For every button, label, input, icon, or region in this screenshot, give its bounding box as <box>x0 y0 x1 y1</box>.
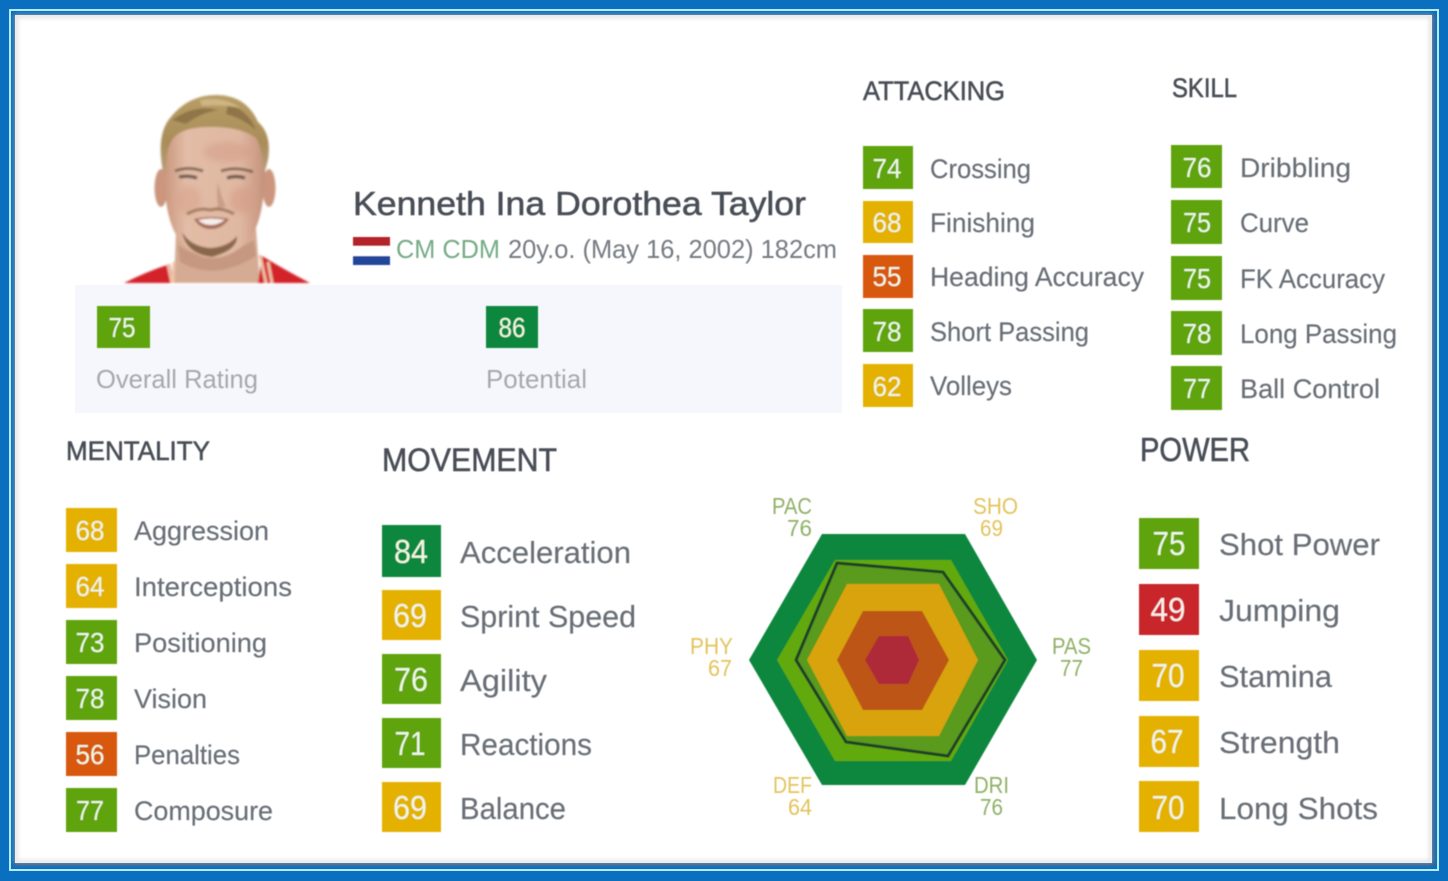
row: dribbling: Dribbling <box>1240 153 1351 183</box>
row: dribbling <box>1171 145 1351 188</box>
row: crossing <box>863 146 1031 189</box>
potential <box>486 306 587 394</box>
overall rating: Overall Rating <box>96 364 258 394</box>
panel: power <box>1139 431 1380 832</box>
hair strands <box>172 104 256 130</box>
overall rating <box>96 306 258 394</box>
row: balance: Balance <box>460 791 566 826</box>
player stats polygon fill <box>796 563 1005 756</box>
radar label: DEF: DEF <box>773 772 812 798</box>
row: curve <box>1171 200 1309 244</box>
forehead and cheek colouring <box>204 142 252 162</box>
player portrait <box>124 95 310 283</box>
radar label: DEF: 64 <box>788 794 812 820</box>
row: interceptions <box>66 564 292 608</box>
row: crossing: Crossing <box>930 154 1031 184</box>
row: agility <box>382 654 548 704</box>
potential: Potential <box>486 364 587 394</box>
radar label: DRI <box>974 772 1009 820</box>
row: vision <box>66 676 207 720</box>
heading: movement: MOVEMENT <box>382 442 557 478</box>
eyes <box>179 176 245 178</box>
row: short passing: 78 <box>872 316 902 347</box>
row: shot power: Shot Power <box>1219 527 1380 562</box>
jersey <box>124 256 310 283</box>
row: volleys <box>863 364 1012 407</box>
row: aggression: 68 <box>76 515 104 546</box>
row: long shots: 70 <box>1152 789 1184 826</box>
row: interceptions: 64 <box>76 571 104 602</box>
heading: skill: SKILL <box>1172 73 1237 103</box>
panel: skill <box>1171 73 1397 410</box>
row: strength <box>1139 716 1340 767</box>
row: aggression: Aggression <box>134 516 269 546</box>
panel: movement <box>382 442 636 832</box>
row: reactions: Reactions <box>460 727 592 762</box>
player name: Kenneth Ina Dorothea Taylor <box>353 185 806 222</box>
ears <box>154 169 168 207</box>
radar label: PAS: 77 <box>1060 655 1083 681</box>
row: heading accuracy: 55 <box>872 261 902 292</box>
row: long passing <box>1171 311 1397 355</box>
row: penalties: Penalties <box>134 740 240 770</box>
panel: rating background <box>75 285 842 413</box>
row: finishing: Finishing <box>930 208 1035 238</box>
goatee beard <box>182 232 237 257</box>
row: long passing: Long Passing <box>1240 319 1397 349</box>
row: finishing <box>863 201 1035 243</box>
panel: mentality <box>66 436 292 832</box>
row: heading accuracy <box>863 255 1144 298</box>
row: fk accuracy <box>1171 256 1385 300</box>
radar label: PHY: 67 <box>708 655 732 681</box>
row: composure <box>66 788 273 832</box>
row: vision: Vision <box>134 684 207 714</box>
row: finishing: 68 <box>872 207 902 238</box>
row: stamina <box>1139 650 1333 701</box>
panel: attacking <box>863 76 1144 407</box>
row: acceleration: Acceleration <box>460 535 631 570</box>
radar band: under 50 <box>865 636 919 684</box>
row: jumping <box>1139 584 1340 635</box>
row: balance: 69 <box>393 789 427 826</box>
row: reactions: 71 <box>394 725 426 762</box>
eyebrows <box>175 168 253 172</box>
chart: hexagon radar <box>749 534 1037 785</box>
radar label: DRI: 76 <box>980 794 1003 820</box>
row: positioning <box>66 620 267 664</box>
radar band: 60-69 <box>807 584 978 736</box>
radar label: PAC: 76 <box>787 515 812 541</box>
row: reactions <box>382 718 592 768</box>
row: curve: Curve <box>1240 208 1309 238</box>
radar label: DEF <box>773 772 812 820</box>
row: curve: 75 <box>1183 207 1211 238</box>
row: vision: 78 <box>76 683 104 714</box>
icon: Netherlands flag <box>353 237 390 265</box>
heading: mentality: MENTALITY <box>66 436 210 466</box>
row: balance <box>382 782 566 832</box>
row: long shots: Long Shots <box>1219 791 1378 826</box>
row: aggression <box>66 508 269 552</box>
row: composure: Composure <box>134 796 273 826</box>
row: sprint speed: 69 <box>393 597 427 634</box>
overall rating: 75 <box>108 312 136 343</box>
row: acceleration <box>382 525 631 577</box>
row: interceptions: Interceptions <box>134 572 292 602</box>
row: penalties <box>66 732 240 776</box>
row: ball control: 77 <box>1183 373 1211 404</box>
radar band: 50-59 <box>837 611 949 710</box>
row: volleys: Volleys <box>930 371 1012 401</box>
nose <box>202 182 226 210</box>
radar label: PAS: PAS <box>1052 633 1091 659</box>
neck <box>174 228 260 283</box>
radar band: 80+ <box>749 534 1037 785</box>
row: positioning: Positioning <box>134 628 267 658</box>
row: ball control: Ball Control <box>1240 374 1380 404</box>
moustache <box>187 209 234 214</box>
row: shot power <box>1139 518 1380 569</box>
row: dribbling: 76 <box>1182 152 1212 183</box>
row: strength: 67 <box>1150 723 1184 760</box>
row: composure: 77 <box>76 795 104 826</box>
row: positioning: 73 <box>76 627 104 658</box>
neck shadow <box>178 240 256 271</box>
radar label: PHY <box>690 633 733 681</box>
face <box>164 122 265 258</box>
row: crossing: 74 <box>872 153 902 184</box>
row: sprint speed <box>382 590 636 640</box>
row: fk accuracy: 75 <box>1183 263 1211 294</box>
row: strength: Strength <box>1219 725 1340 760</box>
row: agility: 76 <box>394 661 428 698</box>
radar label: PHY: PHY <box>690 633 733 659</box>
hair <box>161 95 269 175</box>
collar <box>168 255 272 283</box>
radar label: PAC <box>772 493 812 541</box>
row: jumping: Jumping <box>1219 593 1340 628</box>
radar band: 70-79 <box>777 560 1008 761</box>
row: heading accuracy: Heading Accuracy <box>930 262 1144 292</box>
radar label: SHO <box>973 493 1018 541</box>
row: long passing: 78 <box>1182 318 1212 349</box>
radar label: SHO: 69 <box>980 515 1003 541</box>
radar label: DRI: DRI <box>974 772 1009 798</box>
row: long shots <box>1139 781 1378 832</box>
radar label: SHO: SHO <box>973 493 1018 519</box>
row: ball control <box>1171 366 1380 410</box>
row: short passing <box>863 309 1089 352</box>
radar label: PAC: PAC <box>772 493 812 519</box>
player details: 20y.o. (May 16, 2002) 182cm <box>508 234 837 264</box>
row: acceleration: 84 <box>394 533 428 570</box>
row: shot power: 75 <box>1152 525 1186 562</box>
row: short passing: Short Passing <box>930 317 1089 347</box>
radar label: PAS <box>1052 633 1091 681</box>
row: agility: Agility <box>460 663 548 698</box>
row: sprint speed: Sprint Speed <box>460 599 636 634</box>
row: stamina: 70 <box>1152 657 1184 694</box>
row: jumping: 49 <box>1150 591 1186 628</box>
row: stamina: Stamina <box>1219 659 1333 694</box>
heading: attacking: ATTACKING <box>863 76 1005 106</box>
row: fk accuracy: FK Accuracy <box>1240 264 1385 294</box>
row: penalties: 56 <box>76 739 104 770</box>
potential: 86 <box>498 312 526 343</box>
player stats polygon outline <box>796 563 1005 756</box>
row: volleys: 62 <box>872 371 902 402</box>
player positions: CM CDM <box>396 234 500 264</box>
mouth <box>194 217 229 229</box>
heading: power: POWER <box>1140 431 1250 468</box>
